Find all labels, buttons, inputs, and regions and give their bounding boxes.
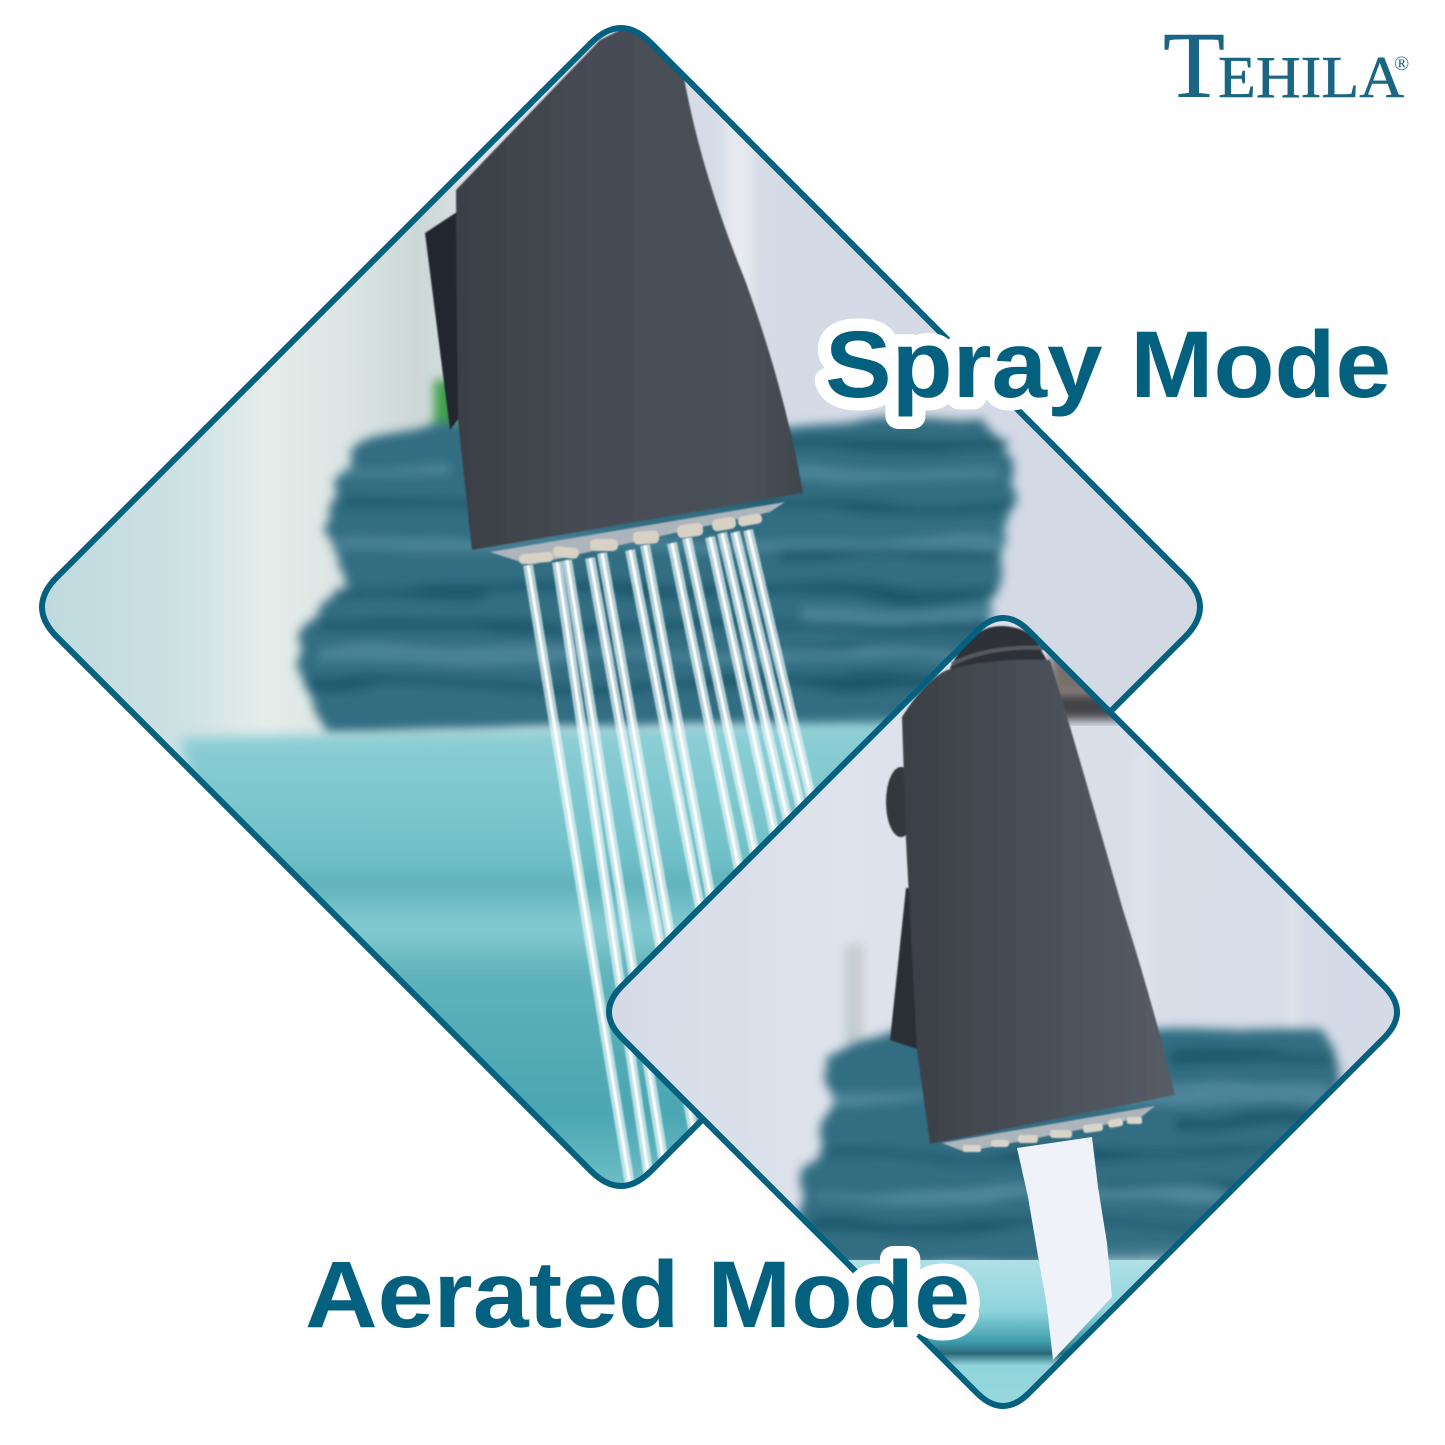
side paddle [890,888,921,1050]
blurred stack of teal towels [180,722,900,1210]
aerated water stream [1017,1137,1112,1360]
rotating cap [949,625,1048,670]
nozzle rubber tips [519,513,763,564]
water spray streams [522,528,815,1183]
blurred stack of dark towels [302,422,1012,730]
logo: Tehila: EHILA [1218,44,1404,110]
heading: Aerated Mode: Aerated Mode [305,1242,970,1348]
photo background [612,622,1394,1260]
dark shelf behind faucet [1059,689,1120,726]
blurred dark towels [799,1028,1340,1262]
aerated head faucet [886,626,1175,1152]
panel: spray mode photo diamond [20,0,1230,1210]
green object behind faucet [434,380,460,430]
toggle button [885,766,907,838]
blurred teal towels [848,1260,1158,1403]
nozzle face [942,1106,1155,1152]
logo: Tehila [1163,14,1409,118]
photo background [45,31,1197,768]
side button [424,212,459,430]
logo: Tehila: ® [1394,53,1409,75]
nozzle face [490,502,785,565]
panel: aerated mode photo diamond [590,600,1420,1430]
logo: Tehila: T [1163,14,1225,118]
heading: Spray Mode: Spray Mode [825,312,1391,418]
nozzle rubber tips [963,1117,1142,1152]
spray head faucet [425,20,803,565]
